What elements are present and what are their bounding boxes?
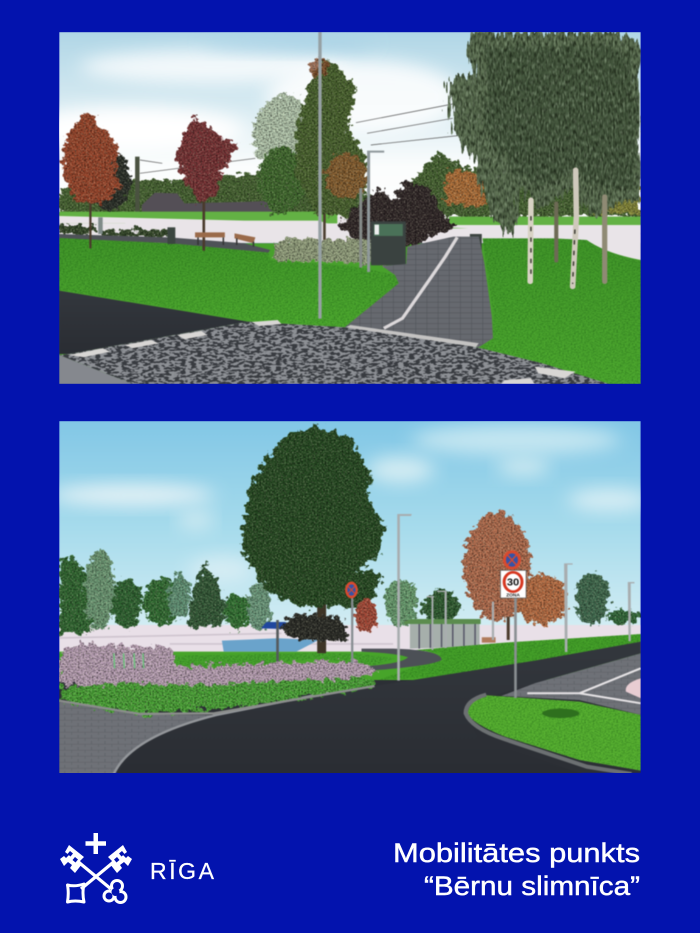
speed zone 30 sign (500, 550, 526, 698)
benches and bins (98, 216, 483, 251)
right key bit (108, 845, 132, 873)
road curb (114, 683, 375, 774)
birch trunks (530, 170, 605, 287)
photo: bottom road rendering (51, 421, 650, 774)
crossing light edge tiles (69, 320, 576, 384)
cross (86, 833, 106, 854)
second red tree (175, 117, 237, 251)
left key bit (60, 845, 84, 873)
left treeline (59, 550, 271, 633)
ground base (59, 625, 641, 653)
lamp pole near (318, 32, 322, 319)
big tree (240, 426, 386, 659)
pale background tree (249, 92, 307, 165)
dark ornamental bush (337, 180, 458, 247)
photo: top park path rendering (21, 32, 641, 384)
ground base (59, 216, 641, 243)
title line 1: Mobilitātes punkts (393, 838, 640, 868)
key shafts (76, 860, 116, 889)
green tree mid (258, 147, 305, 213)
shelter (404, 619, 481, 649)
right lawn strip (378, 634, 641, 680)
lamp posts (397, 514, 634, 681)
red-orange tree (464, 512, 568, 640)
curved footpath (352, 649, 442, 672)
water-blue glass area (222, 638, 319, 652)
birch foliage (447, 32, 641, 237)
pavement white markings (527, 668, 641, 703)
left red tree (62, 112, 131, 248)
patterned crossing (59, 322, 609, 384)
lavender bed (59, 643, 378, 690)
bench and bike racks (82, 637, 496, 657)
far grass strip (59, 212, 641, 228)
near no-stopping sign (345, 582, 358, 663)
paved pedestrian path (345, 237, 493, 347)
right distant trees (384, 572, 641, 627)
pale round island edge (626, 678, 641, 698)
sky with clouds (21, 32, 641, 219)
city name: RĪGA (150, 858, 215, 884)
sign pole (359, 188, 362, 268)
speed zone 30 sign: ZONA (506, 593, 521, 597)
footer logo: Riga crossed keys (60, 833, 132, 904)
planter curb (59, 686, 375, 714)
speed zone 30 sign: 30 (507, 577, 519, 588)
left lawn (59, 238, 399, 328)
curb light strip (345, 325, 479, 347)
blue car (261, 622, 292, 629)
square key bow (68, 884, 84, 902)
sky with clouds (51, 421, 650, 634)
green plants row (59, 678, 375, 715)
dark road right part (118, 642, 641, 774)
overhead wires (140, 104, 464, 173)
right lawn (477, 238, 641, 384)
ornamental grass bed (270, 238, 404, 263)
clover key bow (102, 879, 128, 904)
information board (371, 221, 406, 265)
green island (468, 695, 641, 771)
central lawn (170, 653, 395, 670)
far pole (276, 620, 279, 662)
tactile white line (384, 237, 457, 328)
island curb (466, 695, 631, 774)
small red bush (355, 598, 378, 632)
right pavement (501, 653, 641, 715)
centre autumn tree (296, 58, 367, 243)
road stripes in pale plaza (59, 633, 393, 644)
bottom-left sidewalk (59, 355, 132, 384)
left paved corner (59, 702, 218, 774)
lamp pole far (367, 151, 384, 272)
pale road (59, 216, 641, 260)
background treeline and fence (59, 152, 641, 220)
title line 2: “Bērnu slimnīca” (424, 871, 640, 901)
bike racks (114, 653, 144, 668)
hedge and low path (59, 225, 168, 237)
island shadow (542, 709, 579, 718)
dark asphalt (59, 291, 248, 354)
